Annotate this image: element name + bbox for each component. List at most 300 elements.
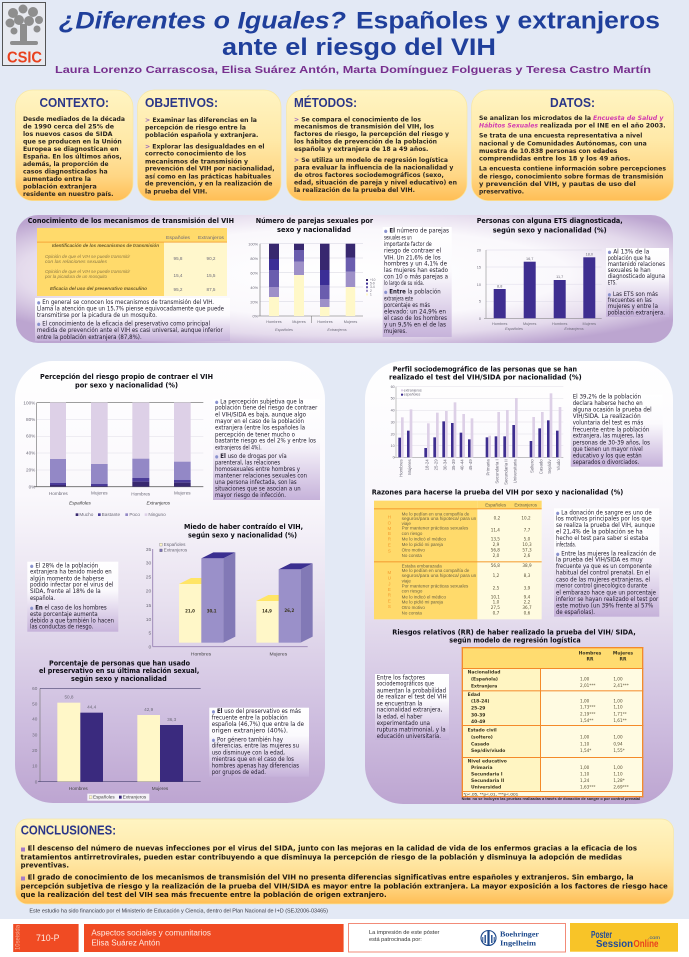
- chart: perfil sociodemográfico: Sep/div: [547, 458, 552, 474]
- table: razones: seguros/para una hipoteca/ para un: [402, 516, 477, 521]
- chart: ETS diagnosticada: 16,7: [526, 257, 533, 261]
- chart: perfil sociodemográfico: 50: [391, 397, 395, 401]
- chart: número de parejas sexuales: Españoles: [275, 328, 293, 332]
- chart: percepción del riesgo: Poco: [129, 512, 140, 517]
- footer: PosterSessionOnline logo: Poster: [591, 930, 612, 941]
- text: ETS: población que ha: [608, 254, 651, 262]
- table: conocimiento: 95,8: [174, 256, 183, 261]
- table: riesgos relativos: RR: [587, 657, 594, 663]
- chart: número de parejas sexuales: Hombres: [266, 320, 282, 324]
- text: razones: la prueba del VIH/SIDA es muy: [556, 557, 643, 564]
- heading: perfil sociodemográfico: realizado el test del VIH/SIDA por nacionalidad (%): [389, 372, 582, 381]
- panel: conocimiento, parejas, ETS: [16, 215, 673, 343]
- chart: perfil sociodemográfico: 20: [391, 432, 395, 436]
- footer: poster number: 10seisida: [16, 924, 22, 950]
- table: riesgos relativos: 1,55*: [613, 748, 625, 753]
- chart: ETS diagnosticada: 8,8: [497, 284, 502, 288]
- table: riesgos relativos: 1,10: [613, 771, 623, 776]
- panel: percepción, miedo, preservativo: [15, 361, 325, 803]
- text: conocimiento: Llama la atención que un 15,7% piense equivocadamente que puede: [37, 304, 224, 312]
- text: parejas: porcentaje es más: [384, 301, 430, 309]
- chart: miedo (3D bars): 30,1: [207, 609, 217, 614]
- table: razones: 11,4: [491, 527, 500, 532]
- table: razones: 9,4: [524, 595, 531, 600]
- text: datos: Encuesta de Salud y: [593, 115, 665, 122]
- panel: objetivos: [138, 90, 281, 201]
- chart: uso del preservativo: 0: [35, 779, 38, 784]
- text: parejas: ● Entre la población: [384, 288, 441, 296]
- text: objetivos: correcto conocimiento de los: [145, 151, 246, 158]
- table: conocimiento: [37, 228, 227, 296]
- table: razones: 1,0: [493, 600, 500, 605]
- table: conocimiento: Eficacia del uso del preservativo masculino: [50, 286, 147, 291]
- title: ante el riesgo del VIH: [222, 34, 496, 61]
- heading: preservativo: Porcentaje de personas que han usado: [49, 658, 190, 667]
- text: datos: nacional y de Comunidades Autónomas, con una: [479, 140, 647, 147]
- heading: ETS: Personas con alguna ETS diagnosticada,: [477, 216, 623, 225]
- chart: ETS diagnosticada: 18,0: [586, 252, 593, 256]
- text: percepción: extranjeros del 4%).: [215, 444, 262, 451]
- text: preservativo: origen extranjero (40%).: [212, 727, 288, 734]
- table: razones: 57,3: [522, 548, 532, 553]
- chart: perfil sociodemográfico: 10: [391, 444, 395, 448]
- table: razones: [374, 501, 542, 619]
- chart: percepción del riesgo: Hombres: [131, 491, 151, 496]
- table: riesgos relativos: (Española): [471, 677, 498, 683]
- text: percepción: una persona infectada, son las: [215, 479, 297, 486]
- text: conclusiones: preventivas.: [21, 861, 69, 869]
- chart: miedo (3D bars): 26,2: [284, 608, 294, 613]
- text: parejas: elevado: un 24,9% en: [384, 309, 446, 316]
- heading: preservativo: según sexo y nacionalidad: [71, 674, 167, 683]
- text: riesgos relativos: la edad, el haber: [377, 713, 423, 720]
- text: contexto: los nuevos casos de SIDA: [23, 131, 113, 138]
- footer: PosterSessionOnline logo: [570, 923, 678, 952]
- chart: número de parejas sexuales: Mujeres: [292, 320, 306, 324]
- chart: uso del preservativo: 60: [32, 686, 38, 691]
- heading: percepción del riesgo: Percepción del riesgo propio de contraer el VIH: [40, 372, 213, 381]
- text: miedo: debido a que también lo hacen: [30, 616, 114, 624]
- text: miedo: [27, 562, 118, 632]
- text: métodos: la realización de la prueba del VIH.: [294, 187, 415, 194]
- chart: perfil sociodemográfico: 18-24: [424, 459, 429, 470]
- heading: riesgos relativos: [392, 628, 636, 644]
- text: parejas: sexuales es un: [384, 234, 412, 241]
- table: razones: U: [388, 576, 391, 581]
- text: razones: los motivos principales por los que: [556, 516, 652, 523]
- chart: perfil sociodemográfico: Soltero: [530, 459, 535, 473]
- chart: número de parejas sexuales: 3-4: [370, 285, 375, 289]
- footer: sponsor: [348, 924, 566, 952]
- heading: objetivos: OBJETIVOS:: [145, 95, 218, 110]
- chart: uso del preservativo: 50: [32, 701, 38, 706]
- footer: poster number: [13, 924, 79, 952]
- text: riesgos relativos: sociodemográficos que: [377, 680, 434, 688]
- table: riesgos relativos: [462, 647, 643, 801]
- text: riesgos relativos: se encuentran la: [377, 700, 423, 707]
- text: preservativo: española (46,7%) que entre la de: [212, 721, 304, 728]
- chart: percepción del riesgo: Mujeres: [174, 490, 191, 495]
- table: razones: viaje: [402, 578, 411, 583]
- text: miedo: algún momento de haberse: [30, 574, 104, 582]
- table: riesgos relativos: Secundaria I: [471, 771, 503, 777]
- table: riesgos relativos: 0,94: [613, 741, 623, 746]
- footer white band: [0, 919, 689, 957]
- text: perfil: que tienen un mayor nivel: [573, 446, 643, 453]
- table: riesgos relativos: 1,00: [613, 699, 623, 704]
- table: riesgos relativos: 1,10: [580, 741, 590, 746]
- text: objetivos: > Explorar las desigualdades en el: [145, 143, 264, 150]
- table: riesgos relativos: Universidad: [471, 784, 501, 790]
- footer: topic and author: Aspectos sociales y comunitarios: [91, 929, 211, 938]
- table: conocimiento: con las relaciones sexuales: [45, 259, 108, 264]
- chart: perfil sociodemográfico: 60: [391, 385, 395, 389]
- text: métodos: factores de riesgo, la percepción del riesgo y: [294, 131, 449, 138]
- text: parejas: lo largo de su vida.: [384, 280, 424, 287]
- text: preservativo: hombres apenas hay diferencias: [212, 763, 299, 770]
- text: parejas: ● El número de parejas: [384, 227, 449, 235]
- table: razones: Me lo pedían en una compañía de: [402, 568, 470, 573]
- text: parejas: y un 9,5% en el de las: [384, 321, 446, 328]
- text: miedo: SIDA, frente al 18% de la: [30, 588, 101, 595]
- table: riesgos relativos: 1,73***: [580, 704, 595, 709]
- text: percepción: ● El uso de drogas por vía: [215, 452, 287, 460]
- text: preservativo: mientras que en el caso de los: [212, 756, 294, 763]
- chart: uso del preservativo: Españoles: [93, 795, 115, 800]
- text: preservativo: [209, 707, 309, 777]
- table: riesgos relativos: 1,28*: [613, 778, 625, 783]
- chart: uso del preservativo: 20: [32, 748, 38, 753]
- table: riesgos relativos: 2,19***: [580, 711, 595, 716]
- text: razones: inferior se hayan realizado el test por: [556, 596, 659, 603]
- text: perfil: VIH/SIDA. La realización: [573, 412, 641, 420]
- text: parejas: extranjera este: [384, 295, 413, 302]
- panel: datos: [472, 90, 674, 201]
- table: riesgos relativos: 1,10: [580, 771, 590, 776]
- table: razones: Extranjeros: [514, 502, 538, 507]
- text: ETS: frecuentes en las: [608, 297, 652, 304]
- chart: miedo (3D bars): 20: [146, 589, 152, 595]
- table: razones: J: [388, 581, 390, 586]
- table: riesgos relativos: 2,69***: [613, 784, 629, 789]
- text: conclusiones: El descenso del número de nuevas infecciones por el virus del SIDA, junto con las mejoras en la calidad de vida de los enfermos gracias a la eficacia de los: [28, 845, 637, 853]
- chart: percepción del riesgo: 60%: [26, 434, 35, 439]
- chart: uso del preservativo: Extranjeros: [123, 795, 147, 800]
- text: percepción: población tiene del riesgo de contraer: [215, 404, 318, 412]
- table: razones: 10,1: [491, 595, 500, 600]
- logo: CSIC: CSIC: [7, 50, 42, 66]
- chart: miedo (3D bars): 0: [149, 645, 152, 651]
- text: razones: caso de las mujeres extranjeras, el: [556, 576, 650, 583]
- text: percepción: parenteral, las relaciones: [215, 459, 280, 466]
- chart: ETS diagnosticada: Mujeres: [523, 322, 537, 326]
- text: ETS: sexuales le han: [608, 267, 651, 274]
- text: percepción: el VIH/SIDA es baja, aunque algo: [215, 411, 306, 418]
- table: razones: B: [388, 531, 391, 536]
- chart: miedo (3D bars): 15: [146, 603, 152, 609]
- text: preservativo: frecuente entre la población: [212, 714, 288, 722]
- chart: percepción del riesgo: 0%: [29, 484, 35, 489]
- table: razones: Otro motivo: [402, 605, 425, 610]
- chart: uso del preservativo: Mujeres: [152, 786, 169, 791]
- table: riesgos relativos: 1,00: [580, 699, 590, 704]
- text: contexto: [23, 116, 125, 198]
- table: razones: 27,5: [491, 605, 500, 610]
- heading: parejas: sexo y nacionalidad: [277, 225, 351, 234]
- heading: riesgos relativos: Riesgos relativos (RR) de haber realizado la prueba del VIH/ SIDA,: [392, 628, 636, 637]
- chart: uso del preservativo: 10: [32, 763, 38, 768]
- table: riesgos relativos: Mujeres: [613, 650, 633, 656]
- title: Españoles y extranjeros: [356, 7, 660, 34]
- table: razones: M: [387, 526, 391, 531]
- text: parejas: VIH. Un 21,6% de los: [384, 254, 441, 261]
- table: razones: seguros/para una hipoteca/ para un: [402, 573, 477, 578]
- text: perfil: educativo y los que están: [573, 451, 642, 459]
- chart: uso del preservativo: 30: [32, 733, 38, 738]
- heading: perfil sociodemográfico: [389, 365, 582, 381]
- text: contexto: Europea se diagnostican en: [23, 146, 119, 153]
- text: contexto: además, la proporción de: [23, 161, 108, 168]
- text: parejas: [383, 227, 452, 337]
- chart: percepción del riesgo: 100%: [23, 400, 35, 405]
- text: razones: habitual del control prenatal. En el: [556, 570, 650, 577]
- text: ETS: ● Las ETS son más: [608, 290, 658, 298]
- table: riesgos relativos: Edad: [468, 692, 480, 698]
- text: conocimiento: medida de prevención ante el VIH es casi universal, aunque inferior: [37, 326, 223, 334]
- chart: número de parejas sexuales: 60%: [250, 272, 259, 276]
- text: percepción: situaciones que se asocian a un: [215, 486, 301, 493]
- text: razones: de españolas).: [556, 609, 595, 616]
- text: razones: este motivo (un 39% frente al 57%: [556, 603, 653, 610]
- text: percepción: mantener relaciones sexuales con: [215, 473, 307, 480]
- table: conocimiento: Opinión de que el VIH se puede transmitir: [45, 254, 130, 259]
- table: razones: O: [388, 520, 392, 525]
- table: razones: 2,2: [524, 600, 531, 605]
- table: razones: No consta: [402, 553, 422, 558]
- text: riesgos relativos: [375, 674, 449, 740]
- text: parejas: mujeres.: [384, 328, 407, 335]
- table: razones: R: [388, 537, 392, 542]
- text: razones: ● La donación de sangre es uno de: [556, 508, 652, 516]
- logo: CSIC: [2, 2, 46, 66]
- text: razones: ● Entre las mujeres la realización de: [556, 549, 656, 557]
- text: datos: Se trata de una encuesta representativa a nivel: [479, 133, 642, 140]
- chart: miedo (3D bars): 14,9: [262, 608, 272, 613]
- chart: miedo (3D bars): Hombres: [191, 651, 212, 657]
- table: conocimiento: 90,2: [207, 256, 216, 261]
- table: razones: 3,9: [524, 586, 531, 591]
- chart: miedo (3D bars): Mujeres: [269, 651, 288, 657]
- text: razones: el 21,4% de la población se ha: [556, 527, 643, 535]
- text: razones: hecho el test para saber si estaba: [556, 535, 649, 542]
- text: miedo: extranjera ha tenido miedo en: [30, 569, 112, 576]
- text: conclusiones: percepción subjetiva de riesgo y la realización de la prueba del VIH/SIDA es mayor entre la población extranjera. La mayor exposición a los factores de riesgo hace: [21, 882, 668, 890]
- heading: preservativo: el preservativo en su última relación sexual,: [39, 666, 199, 675]
- table: riesgos relativos: Nota: no se incluyen las pruebas realizadas a través de donación de sangre o por control prenatal: [462, 797, 640, 801]
- table: riesgos relativos: 1,00: [613, 676, 623, 681]
- text: métodos: edad, situación de pareja y nivel educativo) en: [294, 179, 457, 186]
- chart: número de parejas sexuales: 80%: [250, 257, 259, 261]
- table: razones: 0,6: [524, 610, 531, 615]
- chart: miedo (3D bars): Españoles: [164, 542, 186, 547]
- chart: perfil sociodemográfico: Viudo: [556, 459, 561, 470]
- chart: perfil sociodemográfico: Secundaria II: [503, 459, 508, 485]
- text: métodos: los hábitos de prevención de la población: [294, 139, 437, 146]
- panel: contexto: [16, 90, 133, 201]
- table: riesgos relativos: Nivel educativo: [468, 758, 507, 764]
- text: riesgos relativos: educación universitaria.: [377, 732, 441, 740]
- text: percepción: percepción de tener mucho o: [215, 430, 295, 438]
- heading: métodos: MÉTODOS:: [294, 95, 357, 110]
- text: ETS: ● Al 13% de la: [608, 249, 650, 256]
- chart: perfil sociodemográfico: 45-49: [468, 459, 473, 470]
- text: razones: menor control ginecológico durante: [556, 582, 648, 590]
- table: razones: H: [388, 515, 391, 520]
- text: perfil: voluntaria del test es más: [573, 419, 643, 427]
- table: conocimiento: Extranjeros: [198, 235, 225, 240]
- table: razones: 8,3: [524, 573, 531, 578]
- chart: ETS diagnosticada: 15: [477, 266, 481, 270]
- table: riesgos relativos: RR: [620, 657, 627, 663]
- text: preservativo: ● Por género también hay: [212, 736, 283, 744]
- table: razones: E: [388, 587, 391, 592]
- text: parejas: importante factor de: [384, 241, 432, 248]
- heading: conclusiones: CONCLUSIONES:: [21, 822, 116, 837]
- text: preservativo: por grupos de edad.: [212, 769, 266, 776]
- footer: PosterSessionOnline logo: Session: [596, 939, 633, 950]
- heading: riesgos relativos: según modelo de regresión logística: [449, 635, 581, 644]
- chart: perfil sociodemográfico: Secundaria I: [495, 459, 500, 484]
- chart: percepción del riesgo: Mujeres: [91, 490, 108, 495]
- text: ETS: mujeres y entre la: [608, 303, 658, 310]
- chart: perfil sociodemográfico: 35-39: [451, 459, 456, 470]
- heading: perfil sociodemográfico: Perfil sociodemográfico de las personas que se han: [393, 365, 577, 374]
- text: datos: [479, 115, 666, 195]
- chart: miedo (3D bars): Extranjeros: [164, 548, 188, 553]
- text: percepción: mayor en el caso de la población: [215, 417, 304, 425]
- text: parejas: el caso de los hombres: [384, 315, 447, 322]
- text: percepción: mayor riesgo de infección.: [215, 491, 286, 499]
- chart: número de parejas sexuales: [248, 242, 376, 332]
- table: razones: M: [387, 570, 391, 575]
- text: preservativo: ● El uso del preservativo es más: [212, 707, 301, 715]
- chart: ETS diagnosticada: 20: [477, 248, 481, 252]
- text: contexto: España. En los últimos años,: [23, 154, 122, 161]
- footer: topic and author: Elisa Suárez Antón: [91, 939, 160, 948]
- table: riesgos relativos: 25-29: [471, 705, 485, 711]
- text: conocimiento: transmitirse por la picadura de un mosquito.: [37, 312, 157, 319]
- table: riesgos relativos: 1,61**: [613, 718, 627, 723]
- text: contexto: Desde mediados de la década: [23, 116, 125, 123]
- table: riesgos relativos: 30-39: [471, 712, 485, 718]
- chart: ETS diagnosticada: [477, 248, 602, 331]
- text: perfil: alguna ocasión la prueba del: [573, 406, 652, 414]
- chart: ETS diagnosticada: Españoles: [505, 327, 523, 331]
- text: perfil: [571, 393, 663, 467]
- heading: ETS: [477, 216, 623, 235]
- table: riesgos relativos: Estado civil: [468, 728, 497, 734]
- table: razones: 56,8: [491, 548, 500, 553]
- table: conocimiento: Opinión de que el VIH se puede transmitir: [45, 269, 130, 274]
- text: riesgos relativos: nacionalidad extranjera,: [377, 707, 442, 714]
- text: riesgos relativos: aumentan la probabilidad: [377, 687, 446, 694]
- chart: percepción del riesgo: Españoles: [69, 501, 92, 506]
- footer: PosterSessionOnline logo: .com: [648, 935, 660, 940]
- chart: número de parejas sexuales: +10: [370, 278, 376, 282]
- text: perfil: personas de 30-39 años, los: [573, 439, 650, 446]
- table: razones: 2,0: [493, 553, 500, 558]
- chart: número de parejas sexuales: 20%: [250, 300, 259, 304]
- table: razones: 56,8: [491, 563, 500, 568]
- chart: número de parejas sexuales: 40%: [250, 286, 259, 290]
- chart: número de parejas sexuales: Hombres: [317, 320, 333, 324]
- chart: perfil sociodemográfico: 40-44: [460, 459, 465, 470]
- table: razones: 2,6: [524, 553, 531, 558]
- heading: percepción del riesgo: [40, 372, 213, 390]
- text: objetivos: percepción de riesgo entre la: [145, 125, 246, 132]
- table: razones: R: [388, 593, 392, 598]
- panel: perfil, razones, riesgos relativos: [365, 361, 673, 804]
- text: parejas: hombres y un 4,1% de: [384, 260, 447, 268]
- table: razones: 38,9: [522, 563, 532, 568]
- text: percepción: [213, 397, 320, 500]
- chart: uso del preservativo: [32, 686, 201, 801]
- table: razones: Me lo pedían en una compañía de: [402, 511, 470, 516]
- text: perfil: separados o divorciados.: [573, 459, 639, 466]
- text: percepción: ● La percepción subjetiva que la: [215, 397, 304, 405]
- text: objetivos: de prevención, y en la realización de: [145, 181, 272, 188]
- chart: ETS diagnosticada: 10: [477, 283, 481, 287]
- text: contexto: población extranjera: [23, 183, 97, 190]
- table: riesgos relativos: Extranjera: [471, 683, 497, 689]
- text: razones: el embarazo hace que un porcentaje: [556, 589, 656, 596]
- table: riesgos relativos: (18-24): [471, 699, 489, 705]
- text: ETS: diagnosticado alguna: [608, 273, 665, 280]
- text: contexto: casos diagnosticados ha: [23, 168, 108, 175]
- table: riesgos relativos: Secundaria II: [471, 778, 505, 784]
- table: razones: 5,0: [524, 537, 531, 542]
- text: ETS: mantenido relaciones: [608, 261, 665, 268]
- table: razones: 10,3: [522, 542, 532, 547]
- chart: perfil sociodemográfico: [391, 385, 563, 485]
- table: conocimiento: 87,5: [207, 287, 216, 292]
- table: razones: 0,2: [494, 516, 501, 521]
- text: datos: preservativo.: [479, 188, 524, 195]
- chart: número de parejas sexuales: 0%: [252, 314, 259, 318]
- chart: percepción del riesgo: Extranjeros: [147, 501, 171, 506]
- text: preservativo: diferencias, entre las mujeres su: [212, 743, 299, 750]
- text: objetivos: mecanismos de transmisión y: [145, 158, 248, 165]
- text: contexto: de 1990 cerca del 25% de: [23, 124, 114, 131]
- footer: sponsor: La impresión de este póster: [369, 930, 440, 936]
- chart: percepción del riesgo: 20%: [26, 467, 35, 472]
- table: conocimiento: 95,2: [174, 287, 183, 292]
- icon: Boehringer Ingelheim: [481, 930, 496, 946]
- chart: miedo (3D bars): [146, 542, 313, 657]
- table: razones: con riesgo: [402, 531, 423, 536]
- text: preservativo: uso disminuye con la edad,: [212, 749, 285, 756]
- table: razones: No consta: [402, 610, 422, 615]
- table: razones: 13,5: [491, 537, 500, 542]
- chart: ETS diagnosticada: 5: [479, 300, 481, 304]
- chart: perfil sociodemográfico: Hombres: [398, 459, 403, 477]
- text: conclusiones: tratamientos antirretrovirales, pueden estar contribuyendo a que disminuya la percepción de riesgo de la población y disminuya la adopción de medidas: [21, 853, 622, 861]
- chart: ETS diagnosticada: Extranjeros: [564, 327, 584, 331]
- table: riesgos relativos: 1,10: [613, 704, 623, 709]
- heading: conocimiento: Conocimiento de los mecanismos de transmisión del VIH: [28, 216, 234, 225]
- text: métodos: española y extranjera de 18 a 49 años.: [294, 146, 428, 153]
- chart: perfil sociodemográfico: 0: [393, 456, 395, 460]
